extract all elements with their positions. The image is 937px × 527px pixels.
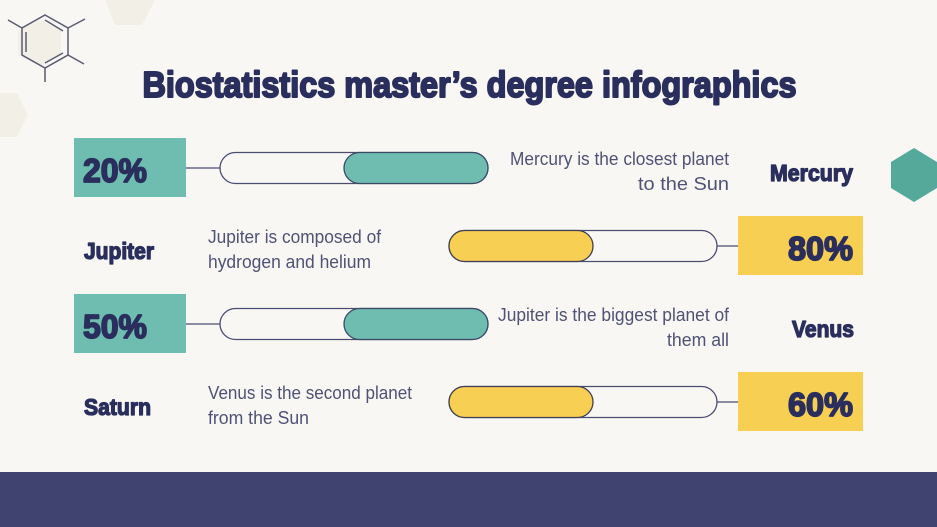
percent box: 50% [74,294,186,353]
row: Mercury 20% [74,138,853,197]
decorative hexagon: left [0,93,28,137]
label: Venus: Venus [792,316,854,342]
progress fill [449,386,593,418]
icon: molecule [8,15,85,82]
connector [186,167,220,169]
label: Saturn: Saturn [84,394,151,420]
description line 2: from the Sun [208,408,309,428]
row: Venus 50% [74,294,854,353]
progress fill [344,308,488,340]
percent box: 60% [738,372,863,431]
description line 2: hydrogen and helium [208,252,371,272]
description: Mercury is the closest planet [510,149,729,169]
row: Saturn 60% [84,372,863,431]
percent box: 80% [738,216,863,275]
progress track [220,152,488,184]
title: Biostatistics master’s degree infographics [142,64,796,105]
label: Jupiter: Jupiter [84,238,154,264]
connector [186,323,220,325]
description: Venus is the second planet [208,383,412,403]
description: Jupiter is the biggest planet of [498,305,730,325]
row: Jupiter 80% [84,216,863,275]
description line 2: to the Sun [638,174,729,194]
progress fill [344,152,488,184]
description line 2: them all [667,330,729,350]
progress track [449,230,717,262]
label: Mercury: Mercury [770,160,853,186]
percent value: 80%: 80% [788,230,853,267]
percent value: 60%: 60% [788,386,853,423]
progress track [449,386,717,418]
footer band [0,472,937,527]
hexagon: right teal [891,148,937,202]
connector [717,245,738,247]
description: Jupiter is composed of [208,227,382,247]
progress fill [449,230,593,262]
progress track [220,308,488,340]
decorative hexagon: top [105,0,155,25]
percent value: 50%: 50% [83,308,147,345]
connector [717,401,738,403]
percent value: 20%: 20% [83,152,147,189]
percent box: 20% [74,138,186,197]
